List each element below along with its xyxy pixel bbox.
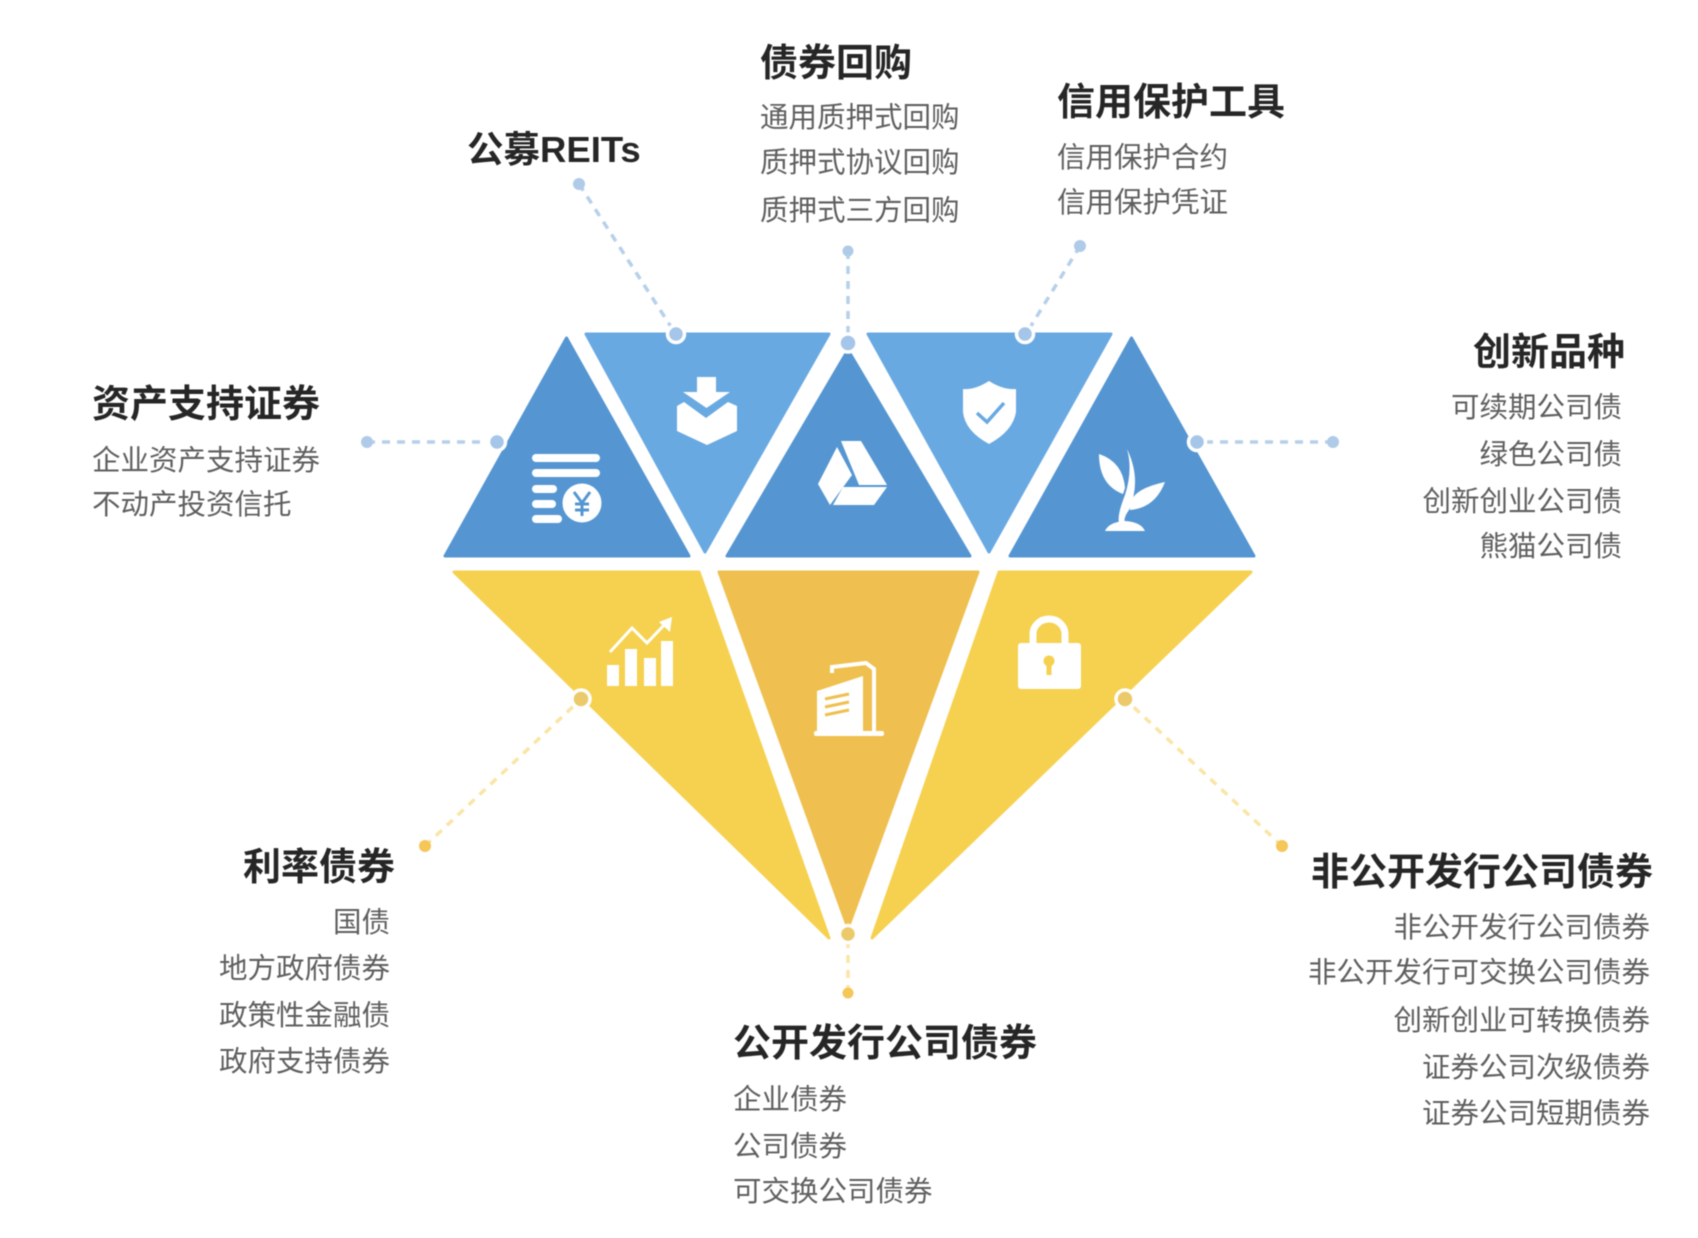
diamond: upper blue row bbox=[445, 334, 1254, 556]
connector: public corporate bonds bbox=[840, 926, 856, 998]
panel: innovative products triangle bbox=[1010, 338, 1254, 556]
label: bond repo: 债券回购 bbox=[760, 43, 912, 85]
label: credit protection tools: 信用保护工具 bbox=[1057, 82, 1285, 124]
icon: shield with check bbox=[963, 381, 1016, 444]
label: asset-backed securities: 企业资产支持证券 bbox=[92, 445, 320, 477]
label: innovative products: 可续期公司债 bbox=[1451, 392, 1622, 424]
label: credit protection tools: 信用保护合约 bbox=[1057, 142, 1228, 174]
label: credit protection tools bbox=[1057, 82, 1285, 219]
label: rate bonds: 利率债券 bbox=[243, 847, 395, 889]
label: rate bonds: 政策性金融债 bbox=[219, 1000, 390, 1032]
label: private corporate bonds: 证券公司次级债券 bbox=[1422, 1052, 1650, 1084]
icon: padlock bbox=[1018, 619, 1081, 689]
label: private corporate bonds bbox=[1308, 852, 1653, 1130]
label: bond repo bbox=[760, 43, 960, 227]
label: rate bonds: 政府支持债券 bbox=[219, 1046, 390, 1078]
label: public corporate bonds: 公司债券 bbox=[733, 1131, 847, 1163]
panel: bond repo triangle bbox=[727, 350, 970, 556]
label: rate bonds: 国债 bbox=[333, 907, 390, 939]
label: private corporate bonds: 证券公司短期债券 bbox=[1422, 1098, 1650, 1130]
label: private corporate bonds: 非公开发行可交换公司债券 bbox=[1308, 957, 1650, 989]
label: private corporate bonds: 非公开发行公司债券 bbox=[1393, 912, 1650, 944]
label: rate bonds bbox=[219, 847, 395, 1078]
connector: public REITs bbox=[573, 178, 684, 342]
label: public corporate bonds: 可交换公司债券 bbox=[733, 1176, 933, 1208]
label: public corporate bonds: 企业债券 bbox=[733, 1084, 847, 1116]
label: asset-backed securities bbox=[92, 384, 320, 521]
panel: private corporate bonds triangle bbox=[872, 572, 1251, 938]
connector: innovative products bbox=[1188, 434, 1339, 450]
label: public corporate bonds: 公开发行公司债券 bbox=[733, 1023, 1037, 1065]
label: asset-backed securities: 不动产投资信托 bbox=[92, 489, 292, 521]
label: innovative products: 创新创业公司债 bbox=[1422, 486, 1622, 518]
panel: public REITs triangle bbox=[586, 334, 829, 552]
icon: rising bar chart bbox=[607, 617, 673, 686]
label: bond repo: 质押式三方回购 bbox=[760, 195, 960, 227]
label: private corporate bonds: 非公开发行公司债券 bbox=[1311, 852, 1653, 894]
panel: asset-backed securities triangle bbox=[445, 338, 689, 556]
label: innovative products: 绿色公司债 bbox=[1479, 439, 1622, 471]
label: asset-backed securities: 资产支持证券 bbox=[92, 384, 320, 426]
label: public REITs: 公募REITs bbox=[467, 129, 641, 170]
diamond: lower yellow row bbox=[454, 572, 1251, 938]
panel: public corporate bonds triangle bbox=[719, 572, 978, 928]
label: bond repo: 通用质押式回购 bbox=[760, 102, 960, 134]
icon: office building bbox=[814, 663, 884, 736]
label: credit protection tools: 信用保护凭证 bbox=[1057, 187, 1228, 219]
label: bond repo: 质押式协议回购 bbox=[760, 147, 960, 179]
connector: credit protection bbox=[1016, 240, 1086, 342]
icon: sprout bbox=[1099, 449, 1165, 531]
label: innovative products bbox=[1422, 332, 1625, 563]
label: private corporate bonds: 创新创业可转换债券 bbox=[1393, 1005, 1650, 1037]
connector: asset-backed securities bbox=[361, 434, 506, 450]
connector: rate bonds bbox=[419, 690, 590, 852]
connector: private corporate bonds bbox=[1116, 690, 1288, 852]
panel: credit protection triangle bbox=[868, 334, 1111, 552]
connector: bond repo bbox=[839, 246, 857, 352]
label: innovative products: 创新品种 bbox=[1473, 332, 1625, 374]
label: innovative products: 熊猫公司债 bbox=[1479, 531, 1622, 563]
icon: list with yen coin bbox=[532, 454, 602, 523]
label: public corporate bonds bbox=[733, 1023, 1037, 1208]
panel: rate bonds triangle bbox=[454, 572, 829, 938]
icon: drive triangle bbox=[818, 441, 887, 505]
icon: download into box bbox=[677, 377, 737, 445]
label: rate bonds: 地方政府债券 bbox=[219, 953, 390, 985]
